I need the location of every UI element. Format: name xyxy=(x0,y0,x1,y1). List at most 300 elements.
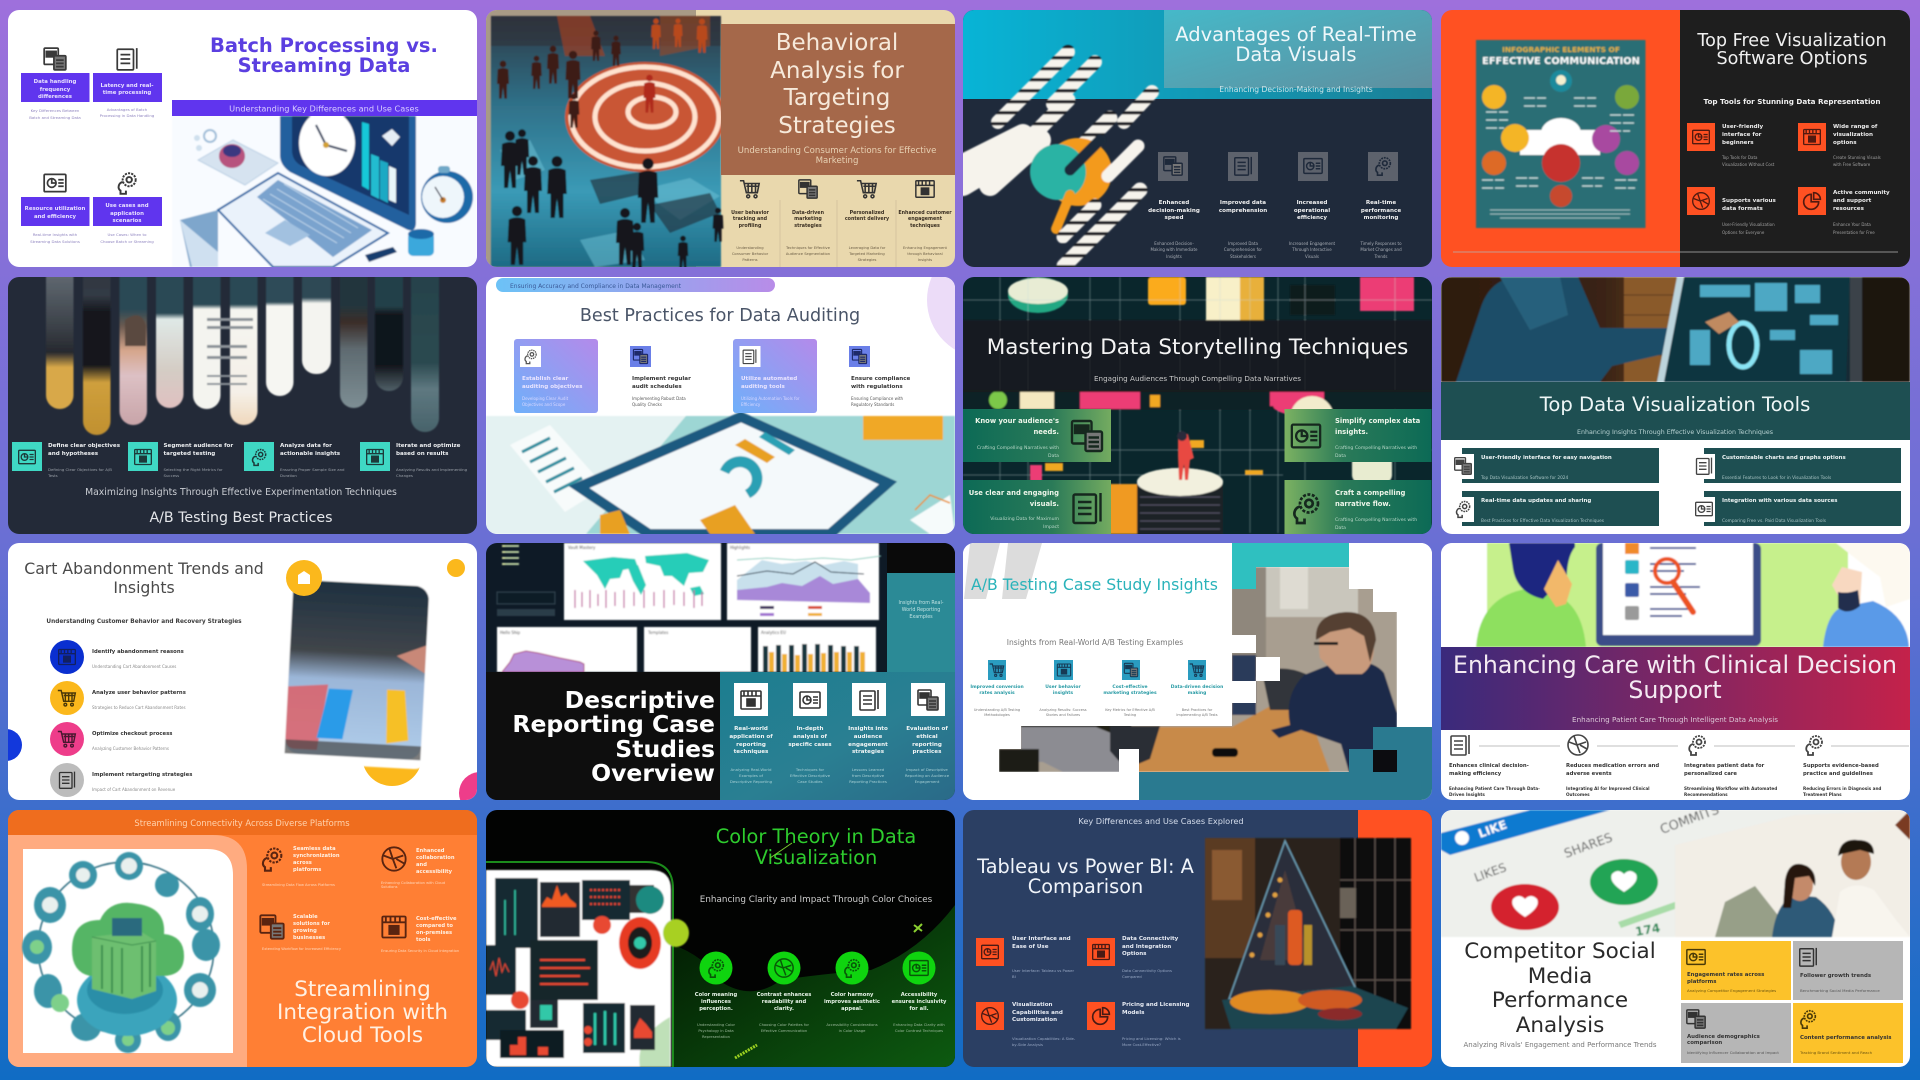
tool list: and support xyxy=(1833,198,1872,204)
item columns: Insights xyxy=(918,258,932,262)
items block: Lessons Learned xyxy=(852,767,885,772)
insights: Understanding A/B Testing xyxy=(974,708,1020,712)
tool row 2 left: Best Practices for Effective Data Visualization Techniques xyxy=(1481,518,1605,524)
tool row 2 left xyxy=(1452,491,1659,526)
tool list: beginners xyxy=(1722,140,1754,146)
principle items xyxy=(695,952,947,1039)
item: latency: time processing xyxy=(103,90,151,96)
step: retargeting xyxy=(50,763,192,797)
title xyxy=(976,855,1195,898)
feature: data synchronization xyxy=(262,846,340,887)
title block: Descriptive xyxy=(565,686,715,714)
illustration: laptop with clock xyxy=(172,110,477,267)
title: Data Visuals xyxy=(1235,43,1357,66)
item: data handling: differences xyxy=(38,94,72,100)
practice items: Duration xyxy=(280,473,297,478)
panel: Batch Processing vs. Streaming Data: Streaming Data xyxy=(238,54,410,77)
item: latency: Advantages of Batch xyxy=(107,107,148,112)
tile: engagement: Engagement rates across xyxy=(1687,972,1764,978)
dashboard screenshot: Analytics EU xyxy=(761,630,786,635)
benefit items: Comprehension for xyxy=(1224,247,1262,252)
tile: content performance: Content performance analysis xyxy=(1800,1035,1891,1041)
item: latency: Processing in Data Handling xyxy=(100,113,155,118)
item columns: Strategies xyxy=(858,258,876,262)
practice items: Changes xyxy=(396,473,413,478)
feature: collaboration: accessibility xyxy=(416,869,453,875)
callout: audience xyxy=(963,409,1111,462)
card: compliance: Ensure compliance xyxy=(851,376,911,382)
comparison items: Capabilities and xyxy=(1012,1010,1063,1016)
principle items: perception. xyxy=(699,1006,733,1012)
feature: scalable: businesses xyxy=(293,935,325,941)
insights: Cost-effective xyxy=(1112,684,1148,690)
title band: Support xyxy=(1628,676,1722,704)
items block: practices xyxy=(913,749,942,755)
items block: Reporting on Audience xyxy=(905,773,950,778)
insights: Improved conversion xyxy=(970,684,1024,690)
practice items: Iterate and optimize xyxy=(396,443,461,449)
item: data handling: Batch and Streaming Data xyxy=(29,115,81,120)
practice items: targeted testing xyxy=(164,451,215,457)
feature: data synchronization: across xyxy=(293,860,312,866)
callout: simplify: Crafting Compelling Narratives with xyxy=(1335,445,1417,451)
photo: man at table xyxy=(999,567,1397,772)
item: data handling: Data handling xyxy=(34,79,77,85)
side strip: World Reporting xyxy=(902,607,940,613)
callout: visuals: Use clear and engaging xyxy=(969,489,1059,497)
title: Comparison xyxy=(1028,875,1143,898)
insights: Testing xyxy=(1123,713,1136,717)
tagline pill xyxy=(496,278,775,292)
insights: Stories and Failures xyxy=(1046,713,1080,717)
item columns: Techniques for Effective xyxy=(785,246,831,250)
panel: Best Practices for Data Auditing xyxy=(486,277,955,534)
benefit items: speed xyxy=(1165,215,1183,221)
item columns: Audience Segmentation xyxy=(786,252,831,256)
illustration: cloud ring xyxy=(22,852,220,1053)
tool list: Supports various xyxy=(1722,198,1776,204)
item: use cases: Use Cases: When to xyxy=(108,232,147,237)
feature: collaboration: collaboration xyxy=(416,855,455,861)
lower teal blocks xyxy=(1139,727,1432,800)
benefit rows xyxy=(1449,735,1909,797)
tagline pill: Ensuring Accuracy and Compliance in Data Management xyxy=(510,283,682,290)
item: use cases: Choose Batch or Streaming xyxy=(100,239,154,244)
feature: cost-effective xyxy=(381,916,459,953)
comparison items: User Interface: Tableau vs Power xyxy=(1012,968,1074,973)
title: Batch Processing vs. xyxy=(210,34,438,57)
tool list: User-Friendly Visualization xyxy=(1722,222,1775,227)
tile: demographics xyxy=(1681,1003,1791,1063)
items block xyxy=(720,672,955,800)
card: automated tools xyxy=(733,339,817,413)
title xyxy=(24,559,264,597)
benefit rows: Treatment Plans xyxy=(1803,792,1842,797)
tool list: Wide range of xyxy=(1833,124,1878,130)
dashboard screenshot: Highlights xyxy=(730,545,750,550)
principle items: Choosing Color Palettes for xyxy=(759,1023,809,1027)
card: compliance: with regulations xyxy=(851,384,903,390)
tool list: options xyxy=(1833,140,1857,146)
principle items: Psychology in Data xyxy=(698,1029,734,1033)
tool list: visualization xyxy=(1833,132,1873,138)
feature: scalable: solutions for xyxy=(293,921,330,927)
photo: social media dashboard: SHARES xyxy=(1562,829,1614,861)
tool list: Create Stunning Visuals xyxy=(1833,155,1881,160)
callout: simplify: insights. xyxy=(1335,428,1368,436)
photo: social media dashboard: 174 xyxy=(1634,921,1661,939)
comparison items: Options xyxy=(1122,951,1147,957)
card: compliance: Ensuring Compliance with xyxy=(851,396,904,401)
badge icon xyxy=(286,560,322,596)
items block: Case Studies xyxy=(797,779,823,784)
tile: follower growth: Benchmarking Social Media Performance xyxy=(1800,988,1880,993)
card: automated tools: Utilize automated xyxy=(741,376,797,382)
tool list: with Free Software xyxy=(1833,162,1871,167)
items block: Real-world xyxy=(734,726,768,732)
subtitle: Insights from Real-World A/B Testing Examples xyxy=(1007,638,1183,647)
title: Color Theory in Data xyxy=(716,825,916,848)
comparison items: Ease of Use xyxy=(1012,944,1049,950)
title xyxy=(770,30,904,139)
benefit items: Timely Responses to xyxy=(1359,241,1402,246)
benefit rows: Reducing Errors in Diagnosis and xyxy=(1803,786,1881,791)
benefit items: Stakeholders xyxy=(1230,254,1256,259)
step: checkout: Optimize checkout process xyxy=(92,731,172,737)
tile: content performance: Tracking Brand Sentiment and Reach xyxy=(1799,1050,1873,1055)
dashboard screenshot: Templates xyxy=(647,630,668,635)
comparison items: User Interface and xyxy=(1012,936,1071,942)
practice items: Ensuring Proper Sample Size and xyxy=(280,467,345,472)
item: use cases: scenarios xyxy=(113,218,141,224)
item columns: Targeted Marketing xyxy=(848,252,885,256)
insights: Methodologies xyxy=(984,713,1010,717)
illustration: audit document xyxy=(486,416,955,534)
item columns: Personalized xyxy=(850,210,885,216)
item: resource utilization: and efficiency xyxy=(34,214,77,220)
benefit items: Insights xyxy=(1166,254,1182,259)
title: Insights xyxy=(113,578,175,597)
items block: reporting xyxy=(736,742,766,748)
subtitle: Understanding Consumer Actions for Effective xyxy=(738,146,936,156)
benefit rows: adverse events xyxy=(1566,771,1612,777)
panel: Top Free Visualization Software Options xyxy=(1441,10,1910,267)
practice items: Define clear objectives xyxy=(48,443,121,449)
dashboard screenshot: Hello Ship xyxy=(500,630,521,635)
tool list: data formats xyxy=(1722,206,1763,212)
tool row 1 right xyxy=(1693,448,1901,483)
card: establish objectives: auditing objectives xyxy=(522,384,583,390)
panel: Color Theory in Data Visualization xyxy=(486,810,955,1067)
title: Software Options xyxy=(1716,49,1868,69)
principle items: improves aesthetic xyxy=(824,999,880,1005)
insights: User behavior xyxy=(1045,684,1082,690)
title: Integration with xyxy=(277,1000,448,1025)
callout: narrative: narrative flow. xyxy=(1335,500,1391,508)
item: resource utilization: Streaming Data Solutions xyxy=(30,239,80,244)
callout: visuals: Visualizing Data for Maximum xyxy=(990,516,1060,522)
item: latency xyxy=(93,48,162,118)
principle items: ensures inclusivity xyxy=(892,999,947,1005)
items block: techniques xyxy=(734,749,769,755)
white mosaic cut-outs xyxy=(963,543,1432,800)
abstract striped art xyxy=(963,52,1152,266)
benefit items: Through Interactive xyxy=(1291,247,1332,252)
photo: analyst at screen xyxy=(1441,277,1910,382)
illustration: two people and monitor xyxy=(1441,543,1910,647)
step: checkout xyxy=(50,722,172,756)
practice items: Analyze data for xyxy=(280,443,332,449)
benefit items: comprehension xyxy=(1219,208,1267,214)
feature: cost-effective: compared to xyxy=(416,923,453,929)
title: Visualization xyxy=(755,846,877,869)
step: retargeting: Impact of Cart Abandonment on Revenue xyxy=(92,787,176,792)
item: data handling: Key Differences Between xyxy=(31,108,80,113)
practice items: Defining Clear Objectives for A/B xyxy=(48,467,112,472)
section subheading: Top Tools for Stunning Data Representation xyxy=(1704,97,1880,106)
benefit items: efficiency xyxy=(1297,215,1327,221)
callout: narrative xyxy=(1284,480,1432,534)
benefit rows: Enhancing Patient Care Through Data- xyxy=(1449,786,1540,791)
title block xyxy=(486,672,720,800)
principle items: Enhancing Data Clarity with xyxy=(893,1023,945,1027)
top tagline band: Streamlining Connectivity Across Diverse Platforms xyxy=(134,818,350,828)
step: retargeting: Implement retargeting strategies xyxy=(92,772,192,778)
items block: Analyzing Real-World xyxy=(731,767,772,772)
benefit rows: Outcomes xyxy=(1566,792,1590,797)
subtitle: Enhancing Clarity and Impact Through Color Choices xyxy=(700,895,933,905)
panel: Batch Processing vs. Streaming Data xyxy=(8,10,477,267)
feature: collaboration: Enhanced xyxy=(416,848,445,854)
card: automated tools: Utilizing Automation Tools for xyxy=(741,396,800,401)
card: automated tools: auditing tools xyxy=(741,384,785,390)
item: use cases xyxy=(93,173,162,244)
title band: Top Data Visualization Tools xyxy=(1539,393,1810,416)
feature: collaboration: and xyxy=(416,862,427,868)
title xyxy=(1464,939,1656,1038)
principle items: Color meaning xyxy=(695,992,737,998)
benefit items: Market Changes and xyxy=(1360,247,1402,252)
subtitle: Marketing xyxy=(816,156,858,166)
photo strips xyxy=(46,260,439,435)
panel: A/B Testing Best Practices xyxy=(8,260,477,534)
photo: social media dashboard: LIKE xyxy=(1476,818,1509,841)
comparison items: and Integration xyxy=(1122,944,1171,950)
card: audit schedules: Implementing Robust Data xyxy=(632,396,686,401)
illustration: data city xyxy=(963,277,1432,534)
benefit items: operational xyxy=(1294,208,1330,214)
insights: Implementing A/B Tests xyxy=(1176,713,1218,717)
top tagline: Key Differences and Use Cases Explored xyxy=(1078,816,1244,826)
photo: social media dashboard xyxy=(1441,803,1910,939)
benefit items: Making with Immediate xyxy=(1150,247,1198,252)
title: A/B Testing Case Study Insights xyxy=(971,575,1218,594)
benefit items: performance xyxy=(1361,208,1401,214)
principle items: Color harmony xyxy=(831,992,874,998)
tile: follower growth: Follower growth trends xyxy=(1800,973,1871,979)
title xyxy=(716,825,916,869)
feature: scalable: growing xyxy=(293,928,317,934)
step: behavior patterns xyxy=(50,681,186,715)
feature: collaboration: Solutions xyxy=(381,885,398,889)
item columns: User behavior xyxy=(731,210,770,216)
practice items xyxy=(12,442,468,478)
panel: Enhancing Care with Clinical Decision Support xyxy=(1441,543,1910,800)
callout: simplify: Data xyxy=(1335,453,1346,459)
items block: reporting xyxy=(912,742,942,748)
tool row 1 left: User-friendly interface for easy navigation xyxy=(1481,455,1612,461)
principle items: readability and xyxy=(762,999,806,1005)
comparison items: More Cost-Effective? xyxy=(1122,1042,1161,1047)
item columns: Enhanced customer xyxy=(898,210,952,216)
subtitle: Engaging Audiences Through Compelling Data Narratives xyxy=(1094,374,1301,383)
items block: specific cases xyxy=(788,742,832,748)
decorative circles xyxy=(0,559,501,814)
step: checkout: Analyzing Customer Behavior Patterns xyxy=(92,746,169,751)
photo: social media dashboard: LIKES xyxy=(1472,860,1508,885)
title xyxy=(1696,31,1887,69)
item: data handling xyxy=(21,48,90,120)
step: behavior patterns: Analyze user behavior patterns xyxy=(92,690,186,696)
items block: Insights into xyxy=(848,726,888,732)
feature: scalable: Scalable xyxy=(293,914,318,920)
comparison items: Customization xyxy=(1012,1017,1057,1023)
callout: visuals xyxy=(963,480,1111,534)
practice items: Analyzing Results and Implementing xyxy=(396,467,468,472)
item columns: marketing xyxy=(794,216,822,222)
principle items: Accessibility xyxy=(901,992,938,998)
benefit rows: Integrating AI for Improved Clinical xyxy=(1566,786,1650,791)
title: A/B Testing Best Practices xyxy=(149,510,333,526)
item: resource utilization: Resource utilization xyxy=(25,206,85,212)
card: establish objectives xyxy=(514,339,598,413)
practice items: Success xyxy=(164,473,179,478)
title: Competitor Social xyxy=(1464,939,1656,964)
benefit items: decision-making xyxy=(1148,208,1200,214)
subtitle: Understanding Customer Behavior and Recovery Strategies xyxy=(46,619,242,625)
illustration: chart collage xyxy=(486,870,689,1067)
items block: strategies xyxy=(852,749,885,755)
practice items: Segment audience for xyxy=(164,443,233,449)
callout: audience: Data xyxy=(1048,453,1059,459)
title: Analysis xyxy=(1516,1013,1604,1038)
tool row 2 right: Comparing Free vs. Paid Data Visualization Tools xyxy=(1722,518,1827,524)
title: Analysis for xyxy=(770,58,904,84)
item columns: content delivery xyxy=(845,216,890,222)
principle items: Representation xyxy=(702,1035,731,1039)
title: Media xyxy=(1528,964,1592,989)
item columns: strategies xyxy=(794,223,822,229)
item columns xyxy=(731,180,952,267)
principle items: clarity. xyxy=(774,1006,794,1012)
card: audit schedules: Quality Checks xyxy=(632,402,662,407)
tool list: Enhance Your Data xyxy=(1833,222,1871,227)
photo: social media dashboard: COMMITS xyxy=(1658,803,1721,838)
tool row 1 left: Top Data Visualization Software for 2024 xyxy=(1480,475,1569,481)
callout: narrative: Data xyxy=(1335,525,1346,531)
items block: from Descriptive xyxy=(852,773,885,778)
teal mosaic blocks xyxy=(1232,543,1349,589)
title band xyxy=(1441,382,1910,440)
title band: Enhancing Insights Through Effective Visualization Techniques xyxy=(1577,429,1773,436)
subtitle band: Understanding Key Differences and Use Cases xyxy=(229,104,419,114)
insights: Analyzing Results: Success xyxy=(1039,708,1087,712)
title: Tableau vs Power BI: A xyxy=(976,855,1195,878)
subtitle band xyxy=(172,100,477,116)
items block: analysis of xyxy=(793,734,828,740)
benefit rows: Enhances clinical decision- xyxy=(1449,763,1529,769)
panel: Advantages of Real-Time Data Visuals xyxy=(963,10,1432,267)
item columns: Enhancing Engagement xyxy=(903,246,948,250)
tile: engagement xyxy=(1681,941,1791,1000)
principle items: appeal. xyxy=(841,1006,863,1012)
items block: engagement xyxy=(848,742,888,748)
embedded infographic xyxy=(1476,40,1646,228)
card: establish objectives: Establish clear xyxy=(522,376,568,382)
tile: demographics: Audience demographics xyxy=(1687,1034,1760,1040)
benefit items: monitoring xyxy=(1364,215,1398,221)
step: identify reasons xyxy=(50,640,184,674)
top tagline band xyxy=(8,810,477,835)
benefit items xyxy=(1148,152,1402,259)
tool list: User-friendly xyxy=(1722,124,1764,130)
title: Cart Abandonment Trends and xyxy=(24,559,264,578)
benefit rows: practice and guidelines xyxy=(1803,771,1873,777)
tile: engagement: Analyzing Competitor Engagement Strategies xyxy=(1687,988,1776,993)
comparison items: BI xyxy=(1012,974,1016,979)
feature: collaboration xyxy=(381,847,455,889)
item columns: Understanding xyxy=(736,246,764,250)
insights: Key Metrics for Effective A/B xyxy=(1105,708,1155,712)
insights xyxy=(970,660,1223,717)
panel: Competitor Social Media Performance Analysis xyxy=(1441,803,1910,1067)
principle items: influences xyxy=(701,999,731,1005)
feature: data synchronization: Seamless data xyxy=(293,846,336,852)
tile: engagement: platforms xyxy=(1687,979,1716,985)
benefit items: Enhanced xyxy=(1159,200,1189,206)
title block: Overview xyxy=(591,759,715,787)
items block: application of xyxy=(729,734,773,740)
photo: target crowd xyxy=(491,16,725,269)
tool list: Top Tools for Data xyxy=(1721,155,1758,160)
tool list: resources xyxy=(1833,206,1865,212)
feature: cost-effective: Ensuring Data Security in Cloud Integration xyxy=(381,949,459,953)
title: Strategies xyxy=(778,113,896,139)
items block: Reporting Practices xyxy=(849,779,887,784)
tool row 1 left xyxy=(1452,448,1659,483)
embedded infographic: INFOGRAPHIC ELEMENTS OF xyxy=(1502,45,1620,54)
panel: Tableau vs Power BI xyxy=(963,810,1432,1067)
step: identify reasons: Identify abandonment reasons xyxy=(92,649,184,655)
practice items: actionable insights xyxy=(280,451,341,457)
image frame xyxy=(8,835,247,1067)
comparison items: Pricing and Licensing xyxy=(1122,1002,1189,1008)
tool list: Options for Everyone xyxy=(1722,230,1765,235)
title: Behavioral xyxy=(776,30,898,56)
embedded infographic: EFFECTIVE COMMUNICATION xyxy=(1482,56,1640,67)
callout: visuals: visuals. xyxy=(1030,500,1059,508)
principle items: Understanding Color xyxy=(697,1023,735,1027)
title block: Reporting Case xyxy=(512,710,715,738)
title band: Enhancing Patient Care Through Intelligent Data Analysis xyxy=(1572,715,1778,724)
tool row 2 left: Real-time data updates and sharing xyxy=(1481,498,1591,504)
item columns: profiling xyxy=(739,223,762,229)
subtitle: Enhancing Decision-Making and Insights xyxy=(1219,85,1373,94)
side strip: Insights from Real- xyxy=(898,600,944,606)
comparison items: Visualization xyxy=(1012,1002,1053,1008)
items block: Impact of Descriptive xyxy=(906,767,948,772)
dashboard screenshot: Vault Mastery xyxy=(568,545,596,550)
